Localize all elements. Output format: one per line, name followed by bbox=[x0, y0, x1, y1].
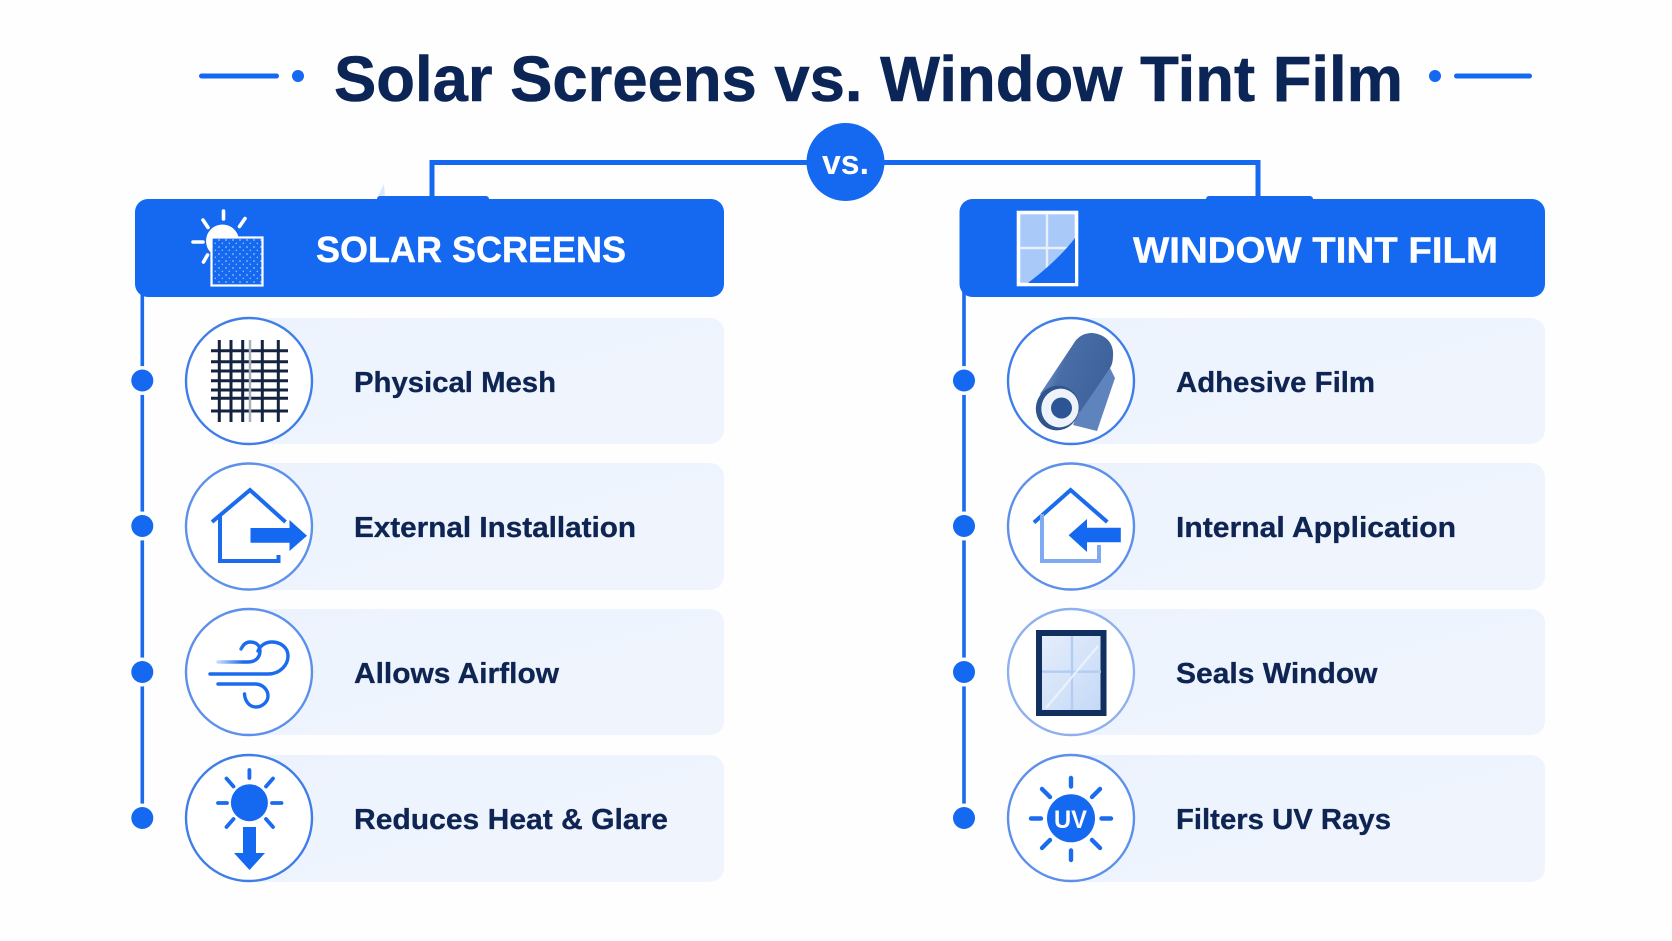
row: external installation bbox=[186, 463, 724, 590]
icon: sun with down arrow bbox=[218, 770, 282, 870]
row: internal application: Internal Application bbox=[1176, 512, 1456, 544]
icon: house with inward arrow bbox=[1034, 490, 1121, 561]
icon: mesh grid bbox=[211, 340, 288, 422]
title ornament right bbox=[1429, 70, 1532, 82]
icon: uv sun: UV bbox=[1054, 806, 1087, 834]
icon: sealed window bbox=[1039, 633, 1104, 713]
icon: film roll bbox=[1029, 333, 1115, 437]
title ornament left bbox=[199, 70, 304, 82]
row: reduces heat and glare bbox=[186, 755, 724, 882]
title: Solar Screens vs. Window Tint Film bbox=[334, 43, 1403, 115]
row: seals window: Seals Window bbox=[1176, 658, 1378, 690]
row: physical mesh bbox=[186, 318, 724, 444]
header: window tint film: WINDOW TINT FILM bbox=[1133, 230, 1498, 270]
row: physical mesh: Physical Mesh bbox=[354, 367, 556, 399]
timeline left bbox=[128, 290, 157, 832]
row: adhesive film bbox=[1008, 318, 1545, 444]
panel: solar screens column bbox=[128, 184, 724, 882]
icon: wind bbox=[210, 642, 288, 707]
row: external installation: External Installation bbox=[354, 512, 636, 544]
header: solar screens: SOLAR SCREENS bbox=[316, 229, 626, 270]
vs badge: vs. bbox=[822, 144, 869, 182]
row: filters uv rays bbox=[1008, 755, 1545, 882]
icon: sun behind mesh screen bbox=[193, 211, 262, 286]
icon: house with outward arrow bbox=[212, 490, 307, 561]
row: seals window bbox=[1008, 609, 1545, 735]
icon: uv sun bbox=[1031, 778, 1111, 860]
row: filters uv rays: Filters UV Rays bbox=[1176, 804, 1391, 836]
connector between headers bbox=[432, 162, 1258, 199]
timeline right bbox=[950, 290, 978, 832]
header: window tint film bbox=[960, 196, 1545, 297]
icon: window with peeling film bbox=[1018, 212, 1076, 284]
header: solar screens bbox=[135, 184, 724, 297]
row: reduces heat and glare: Reduces Heat & Glare bbox=[354, 804, 668, 836]
vs badge bbox=[806, 123, 884, 201]
row: internal application bbox=[1008, 463, 1545, 590]
row: adhesive film: Adhesive Film bbox=[1176, 367, 1375, 399]
row: allows airflow bbox=[186, 609, 724, 735]
panel: window tint film column bbox=[950, 196, 1545, 882]
row: allows airflow: Allows Airflow bbox=[354, 658, 559, 690]
